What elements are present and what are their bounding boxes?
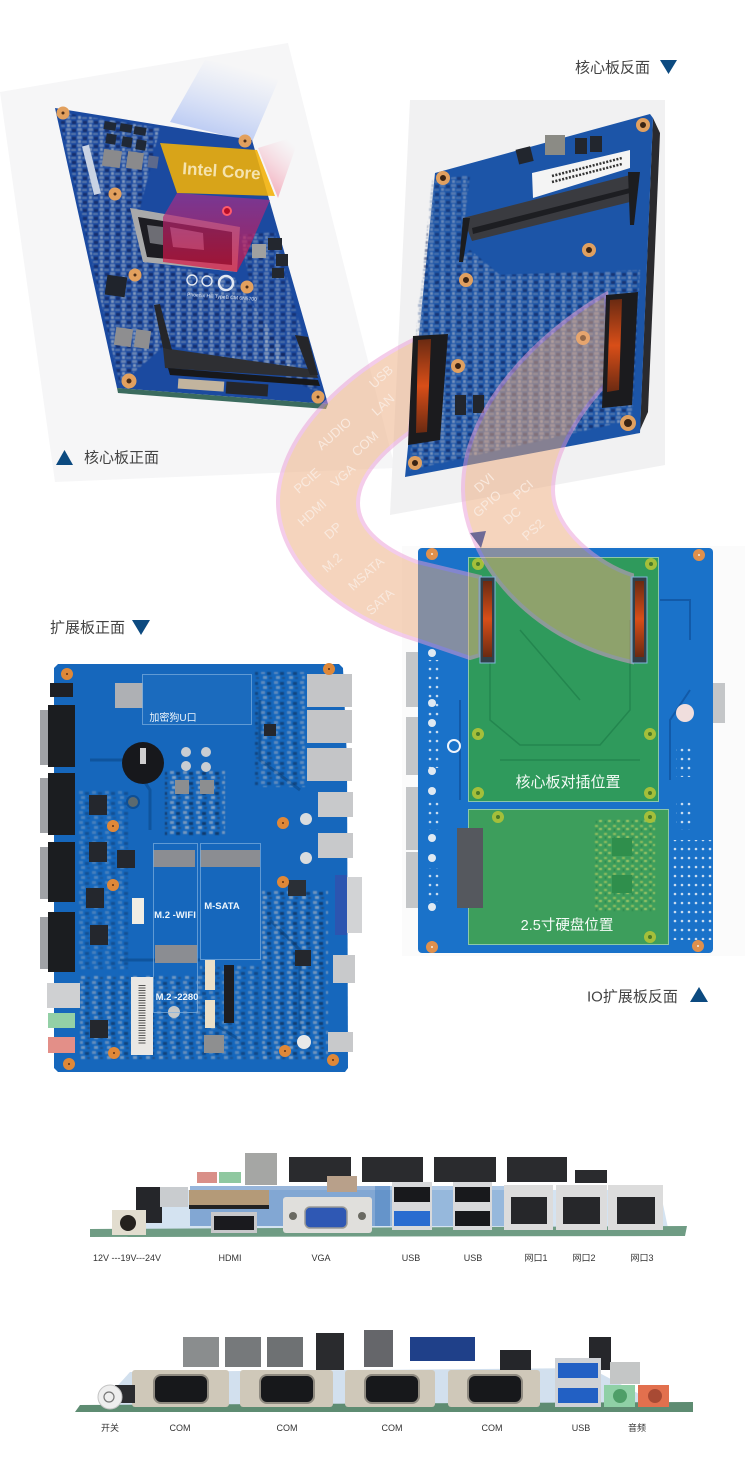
port labels: front COM: COM <box>170 1423 190 1433</box>
COM ports <box>40 705 75 972</box>
memory slot <box>154 304 320 396</box>
disk connector <box>457 828 483 908</box>
VGA port <box>283 1197 372 1233</box>
COM ports <box>132 1370 540 1407</box>
ribbon labels: COM <box>349 428 381 459</box>
buzzer sticker <box>676 704 694 722</box>
capacitors <box>136 1153 357 1223</box>
label: IO expansion back <box>587 987 708 1006</box>
label: M.2 2280: M.2 -2280 <box>156 992 198 1003</box>
port labels: front COM: USB <box>572 1423 590 1433</box>
USB stacks <box>392 1182 492 1230</box>
certification marks <box>187 275 233 290</box>
ribbon labels: PCI <box>510 477 536 502</box>
port labels: front COM: COM <box>482 1423 502 1433</box>
HDMI port <box>211 1212 257 1233</box>
CPU package <box>130 208 240 272</box>
area: dongle USB <box>142 674 252 724</box>
callout: Intel Core highlight <box>160 143 275 272</box>
area: dongle USB: 加密狗U口 <box>149 711 197 724</box>
area: core board socket <box>468 558 658 802</box>
ribbon labels <box>470 470 547 543</box>
beam: blue light <box>170 60 282 142</box>
area: M-SATA: M-SATA <box>204 901 240 912</box>
label: core board front: 核心板正面 <box>84 448 159 466</box>
connectors above ribbons <box>408 292 647 663</box>
ribbon: left signal arc <box>278 338 480 658</box>
area: core board socket: 核心板对插位置 <box>515 773 621 791</box>
green plate <box>75 1402 693 1412</box>
ribbon labels: AUDIO <box>314 414 354 453</box>
port labels: front COM: COM <box>276 1423 298 1433</box>
ribbon labels <box>291 362 397 618</box>
mounting holes <box>64 666 336 1068</box>
port labels: rear IO: 网口3 <box>630 1253 654 1263</box>
label: core board back <box>575 58 677 76</box>
ribbon labels: GPIO <box>470 487 504 520</box>
ribbon: right signal arc <box>463 294 632 662</box>
label: core board back: 核心板反面 <box>575 58 650 76</box>
ribbon labels: LAN <box>369 391 397 419</box>
area: 2.5 inch disk bay <box>468 810 668 944</box>
M.2 and mSATA connectors <box>153 850 260 963</box>
left ports <box>47 683 143 1053</box>
area: M-SATA <box>200 844 260 960</box>
port labels: front COM: 音频 <box>628 1422 646 1433</box>
port labels: rear IO: 网口2 <box>572 1253 596 1263</box>
port labels: front COM: COM <box>382 1423 402 1433</box>
mounting holes <box>428 550 702 950</box>
label sticker <box>532 150 630 198</box>
ribbon labels: DC <box>500 504 524 528</box>
capacitors and chips <box>86 724 312 1053</box>
port labels: rear IO: USB <box>464 1253 482 1263</box>
panel: back board backdrop <box>390 100 665 515</box>
port labels: rear IO: VGA <box>311 1253 331 1263</box>
serial label <box>131 977 153 1055</box>
label: core board front <box>56 448 159 466</box>
board: core module front <box>55 108 328 409</box>
photo: rear IO side view <box>90 1153 687 1237</box>
ribbon labels: SATA <box>363 585 397 618</box>
beam: pink light <box>258 135 300 198</box>
board: IO expansion back <box>406 548 725 953</box>
ribbon labels: DP <box>321 519 345 542</box>
ribbon labels: PS2 <box>519 516 547 543</box>
board silkscreen text: Phoenix Hill TypeB CM 6N5700 <box>187 292 257 303</box>
mounting holes <box>410 120 648 468</box>
USB ports right <box>318 792 353 858</box>
photo: front COM side view <box>75 1330 693 1412</box>
memory slot <box>459 172 640 262</box>
port labels: front COM: 开关 <box>101 1422 119 1433</box>
port labels: rear IO: 网口1 <box>524 1253 548 1263</box>
standoffs in green area <box>474 560 655 941</box>
ribbon labels: DVI <box>471 470 497 495</box>
label: expansion board front: 扩展板正面 <box>50 618 125 636</box>
ribbon labels: VGA <box>328 461 358 490</box>
port labels: rear IO <box>93 1253 654 1263</box>
area: M.2 WIFI <box>154 844 198 1012</box>
green plate <box>90 1226 687 1237</box>
VGA port <box>335 875 362 935</box>
small ICs <box>455 136 602 415</box>
ribbon labels: MSATA <box>345 554 387 594</box>
ribbon labels: M.2 <box>319 550 345 575</box>
board: expansion front <box>40 664 362 1072</box>
ethernet ports <box>307 674 352 781</box>
panel: front board backdrop <box>0 43 395 482</box>
board: core module back <box>405 114 660 477</box>
HDMI and DC ports <box>328 955 355 1052</box>
power button <box>98 1385 135 1409</box>
rear component blocks <box>183 1330 640 1384</box>
port labels: rear IO: HDMI <box>218 1253 242 1263</box>
area: 2.5 inch disk bay: 2.5寸硬盘位置 <box>521 916 613 934</box>
panel: io board backdrop <box>402 546 745 956</box>
DC jack <box>112 1210 146 1235</box>
label: IO expansion back: IO扩展板反面 <box>587 988 678 1006</box>
callout: Intel Core highlight: Intel Core <box>182 159 261 183</box>
port labels: rear IO: USB <box>402 1253 420 1263</box>
ribbon labels: PCIE <box>291 465 324 496</box>
port labels: rear IO: 12V ---19V---24V <box>93 1253 161 1263</box>
ribbon labels: USB <box>366 362 396 391</box>
audio jacks <box>604 1385 669 1407</box>
arrowhead: ribbon tip <box>470 531 486 548</box>
mounting holes <box>59 109 322 401</box>
port labels: front COM <box>101 1422 646 1433</box>
ribbon labels: HDMI <box>295 496 329 529</box>
back COM shells <box>289 1157 607 1183</box>
USB stack <box>555 1358 601 1407</box>
inductor <box>545 135 565 155</box>
chips and inductors <box>82 121 288 349</box>
RJ45 ports <box>504 1185 663 1230</box>
coin battery <box>122 742 164 784</box>
area: M.2 WIFI: M.2 -WIFI <box>154 910 196 921</box>
